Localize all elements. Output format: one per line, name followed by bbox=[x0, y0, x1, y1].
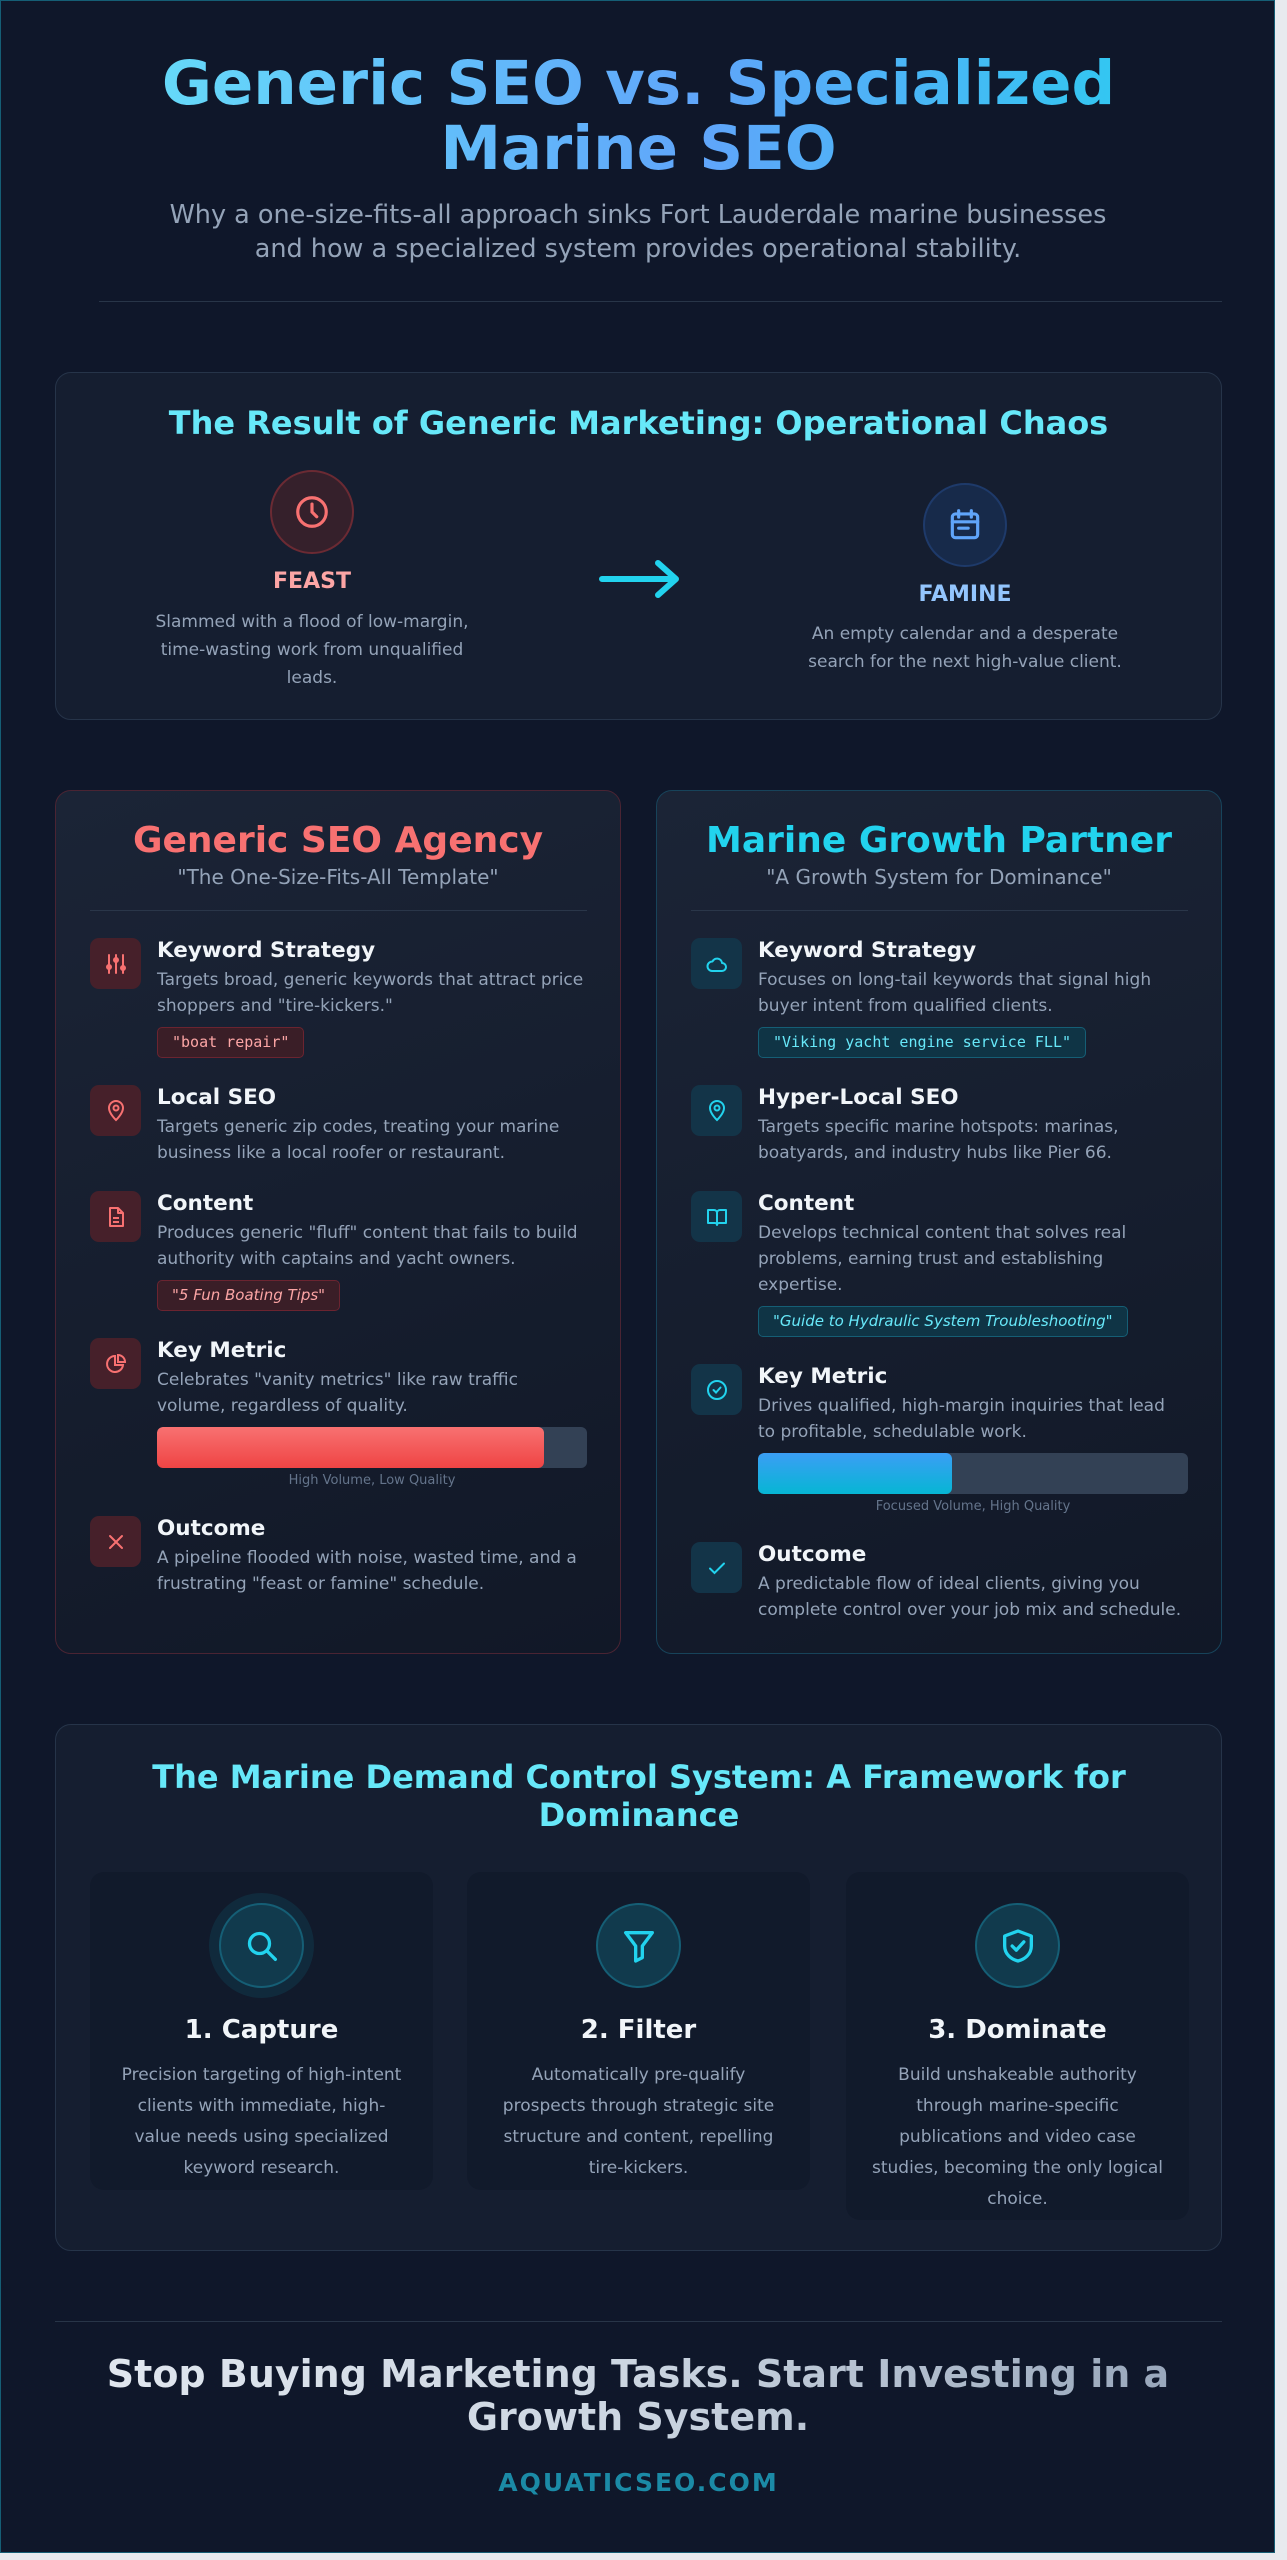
icon: check circle bbox=[691, 1364, 742, 1415]
item: key metric: Focused Volume, High Quality bbox=[876, 1499, 1070, 1514]
icon: sliders bbox=[90, 938, 141, 989]
icon: check bbox=[691, 1542, 742, 1593]
heading: operational chaos: The Result of Generic Marketing: Operational Chaos bbox=[169, 404, 1108, 442]
item: key metric: High Volume, Low Quality bbox=[289, 1473, 455, 1488]
arrow bbox=[599, 560, 679, 598]
icon: search bbox=[219, 1903, 304, 1988]
feast text: Slammed with a flood of low-margin, time-wasting work from unqualified leads. bbox=[155, 612, 468, 688]
icon: cloud bbox=[691, 938, 742, 989]
icon: filter bbox=[596, 1903, 681, 1988]
title: Generic SEO vs. Specialized bbox=[162, 48, 1115, 119]
icon: calendar bbox=[923, 483, 1007, 567]
item: keyword strategy: Targets broad, generic keywords that attract price shoppers and "tire-kickers." bbox=[157, 970, 583, 1016]
item: hyper-local seo: Hyper-Local SEO bbox=[758, 1085, 959, 1110]
icon: clock bbox=[270, 470, 354, 554]
item: outcome: A pipeline flooded with noise, wasted time, and a frustrating "feast or famine" schedule. bbox=[157, 1548, 577, 1594]
item: content: Content bbox=[157, 1191, 253, 1216]
icon: map pin bbox=[691, 1085, 742, 1136]
item: hyper-local seo bbox=[691, 1085, 1119, 1163]
icon: x bbox=[90, 1516, 141, 1567]
icon: book bbox=[691, 1191, 742, 1242]
item: keyword strategy bbox=[90, 938, 583, 1058]
step: filter bbox=[467, 1872, 810, 2190]
item: key metric: Key Metric bbox=[758, 1364, 887, 1389]
item: key metric: Celebrates "vanity metrics" like raw traffic volume, regardless of quality. bbox=[157, 1370, 518, 1416]
heading: Marine Growth Partner bbox=[706, 820, 1172, 861]
panel: generic seo agency: "boat repair" bbox=[172, 1033, 289, 1051]
item: keyword strategy bbox=[691, 938, 1151, 1058]
step: dominate: Build unshakeable authority through marine-specific publications and video case studies, becoming the only logical choice. bbox=[872, 2065, 1163, 2209]
icon: pie chart bbox=[90, 1338, 141, 1389]
panel: marine growth partner: Develops technical content that solves real problems, earning trust and establishing expertise. bbox=[758, 1223, 1126, 1295]
step: dominate bbox=[846, 1872, 1189, 2220]
panel: marine growth partner bbox=[656, 790, 1222, 1654]
item: content bbox=[691, 1191, 1128, 1337]
item: key metric bbox=[691, 1364, 1188, 1514]
item: hyper-local seo: Targets specific marine hotspots: marinas, boatyards, and industry hubs like Pier 66. bbox=[758, 1117, 1119, 1163]
step: filter: 2. Filter bbox=[581, 2015, 696, 2045]
title: Marine SEO bbox=[440, 113, 837, 184]
website: AQUATICSEO.COM bbox=[498, 2468, 779, 2497]
item: local seo: Targets generic zip codes, treating your marine business like a local roofer or restaurant. bbox=[157, 1117, 559, 1163]
item: local seo bbox=[90, 1085, 559, 1163]
item: content: Content bbox=[758, 1191, 854, 1216]
bar: high volume bbox=[157, 1427, 587, 1468]
item: key metric bbox=[90, 1338, 587, 1488]
icon: file bbox=[90, 1191, 141, 1242]
item: key metric: Drives qualified, high-margin inquiries that lead to profitable, schedulable work. bbox=[758, 1396, 1165, 1442]
step: capture bbox=[90, 1872, 433, 2190]
subtitle: and how a specialized system provides operational stability. bbox=[255, 234, 1021, 264]
step: filter: Automatically pre-qualify prospects through strategic site structure and content, repelling tire-kickers. bbox=[503, 2065, 774, 2178]
panel: generic seo agency bbox=[55, 790, 621, 1654]
title bbox=[1, 51, 1276, 181]
feast label: FEAST bbox=[273, 569, 351, 594]
item: keyword strategy: Keyword Strategy bbox=[758, 938, 976, 963]
panel: operational chaos bbox=[55, 372, 1222, 720]
item: keyword strategy: Focuses on long-tail keywords that signal high buyer intent from qualified clients. bbox=[758, 970, 1151, 1016]
item: keyword strategy: Keyword Strategy bbox=[157, 938, 375, 963]
step: capture: 1. Capture bbox=[185, 2015, 338, 2045]
item: outcome bbox=[90, 1516, 577, 1594]
famine text: An empty calendar and a desperate search for the next high-value client. bbox=[808, 624, 1122, 672]
subheading: "A Growth System for Dominance" bbox=[766, 865, 1112, 889]
subtitle bbox=[170, 200, 1106, 264]
famine label: FAMINE bbox=[918, 582, 1012, 607]
item: outcome bbox=[691, 1542, 1181, 1620]
icon: shield bbox=[975, 1903, 1060, 1988]
panel: marine growth partner: "Viking yacht engine service FLL" bbox=[773, 1033, 1071, 1051]
step: dominate: 3. Dominate bbox=[928, 2015, 1107, 2045]
step: capture: Precision targeting of high-intent clients with immediate, high-value needs using specialized keyword research. bbox=[122, 2065, 401, 2178]
icon: map pin bbox=[90, 1085, 141, 1136]
closing headline: Stop Buying Marketing Tasks. Start Investing in a Growth System. bbox=[107, 2352, 1169, 2439]
panel: marine growth partner: "Guide to Hydraulic System Troubleshooting" bbox=[773, 1312, 1113, 1330]
subtitle: Why a one-size-fits-all approach sinks Fort Lauderdale marine businesses bbox=[170, 200, 1106, 230]
item: local seo: Local SEO bbox=[157, 1085, 276, 1110]
panel: marine demand control system bbox=[55, 1724, 1222, 2251]
item: outcome: Outcome bbox=[758, 1542, 866, 1567]
item: key metric: Key Metric bbox=[157, 1338, 286, 1363]
item: content bbox=[90, 1191, 578, 1311]
item: outcome: Outcome bbox=[157, 1516, 265, 1541]
heading: The Marine Demand Control System: A Framework for Dominance bbox=[152, 1758, 1126, 1834]
panel: generic seo agency: "5 Fun Boating Tips" bbox=[172, 1286, 325, 1304]
item: outcome: A predictable flow of ideal clients, giving you complete control over your job mix and schedule. bbox=[758, 1574, 1181, 1620]
bar: focused volume bbox=[758, 1453, 1188, 1494]
subheading: "The One-Size-Fits-All Template" bbox=[177, 865, 499, 889]
item: content: Produces generic "fluff" content that fails to build authority with captains and yacht owners. bbox=[157, 1223, 578, 1269]
heading: Generic SEO Agency bbox=[133, 820, 543, 861]
